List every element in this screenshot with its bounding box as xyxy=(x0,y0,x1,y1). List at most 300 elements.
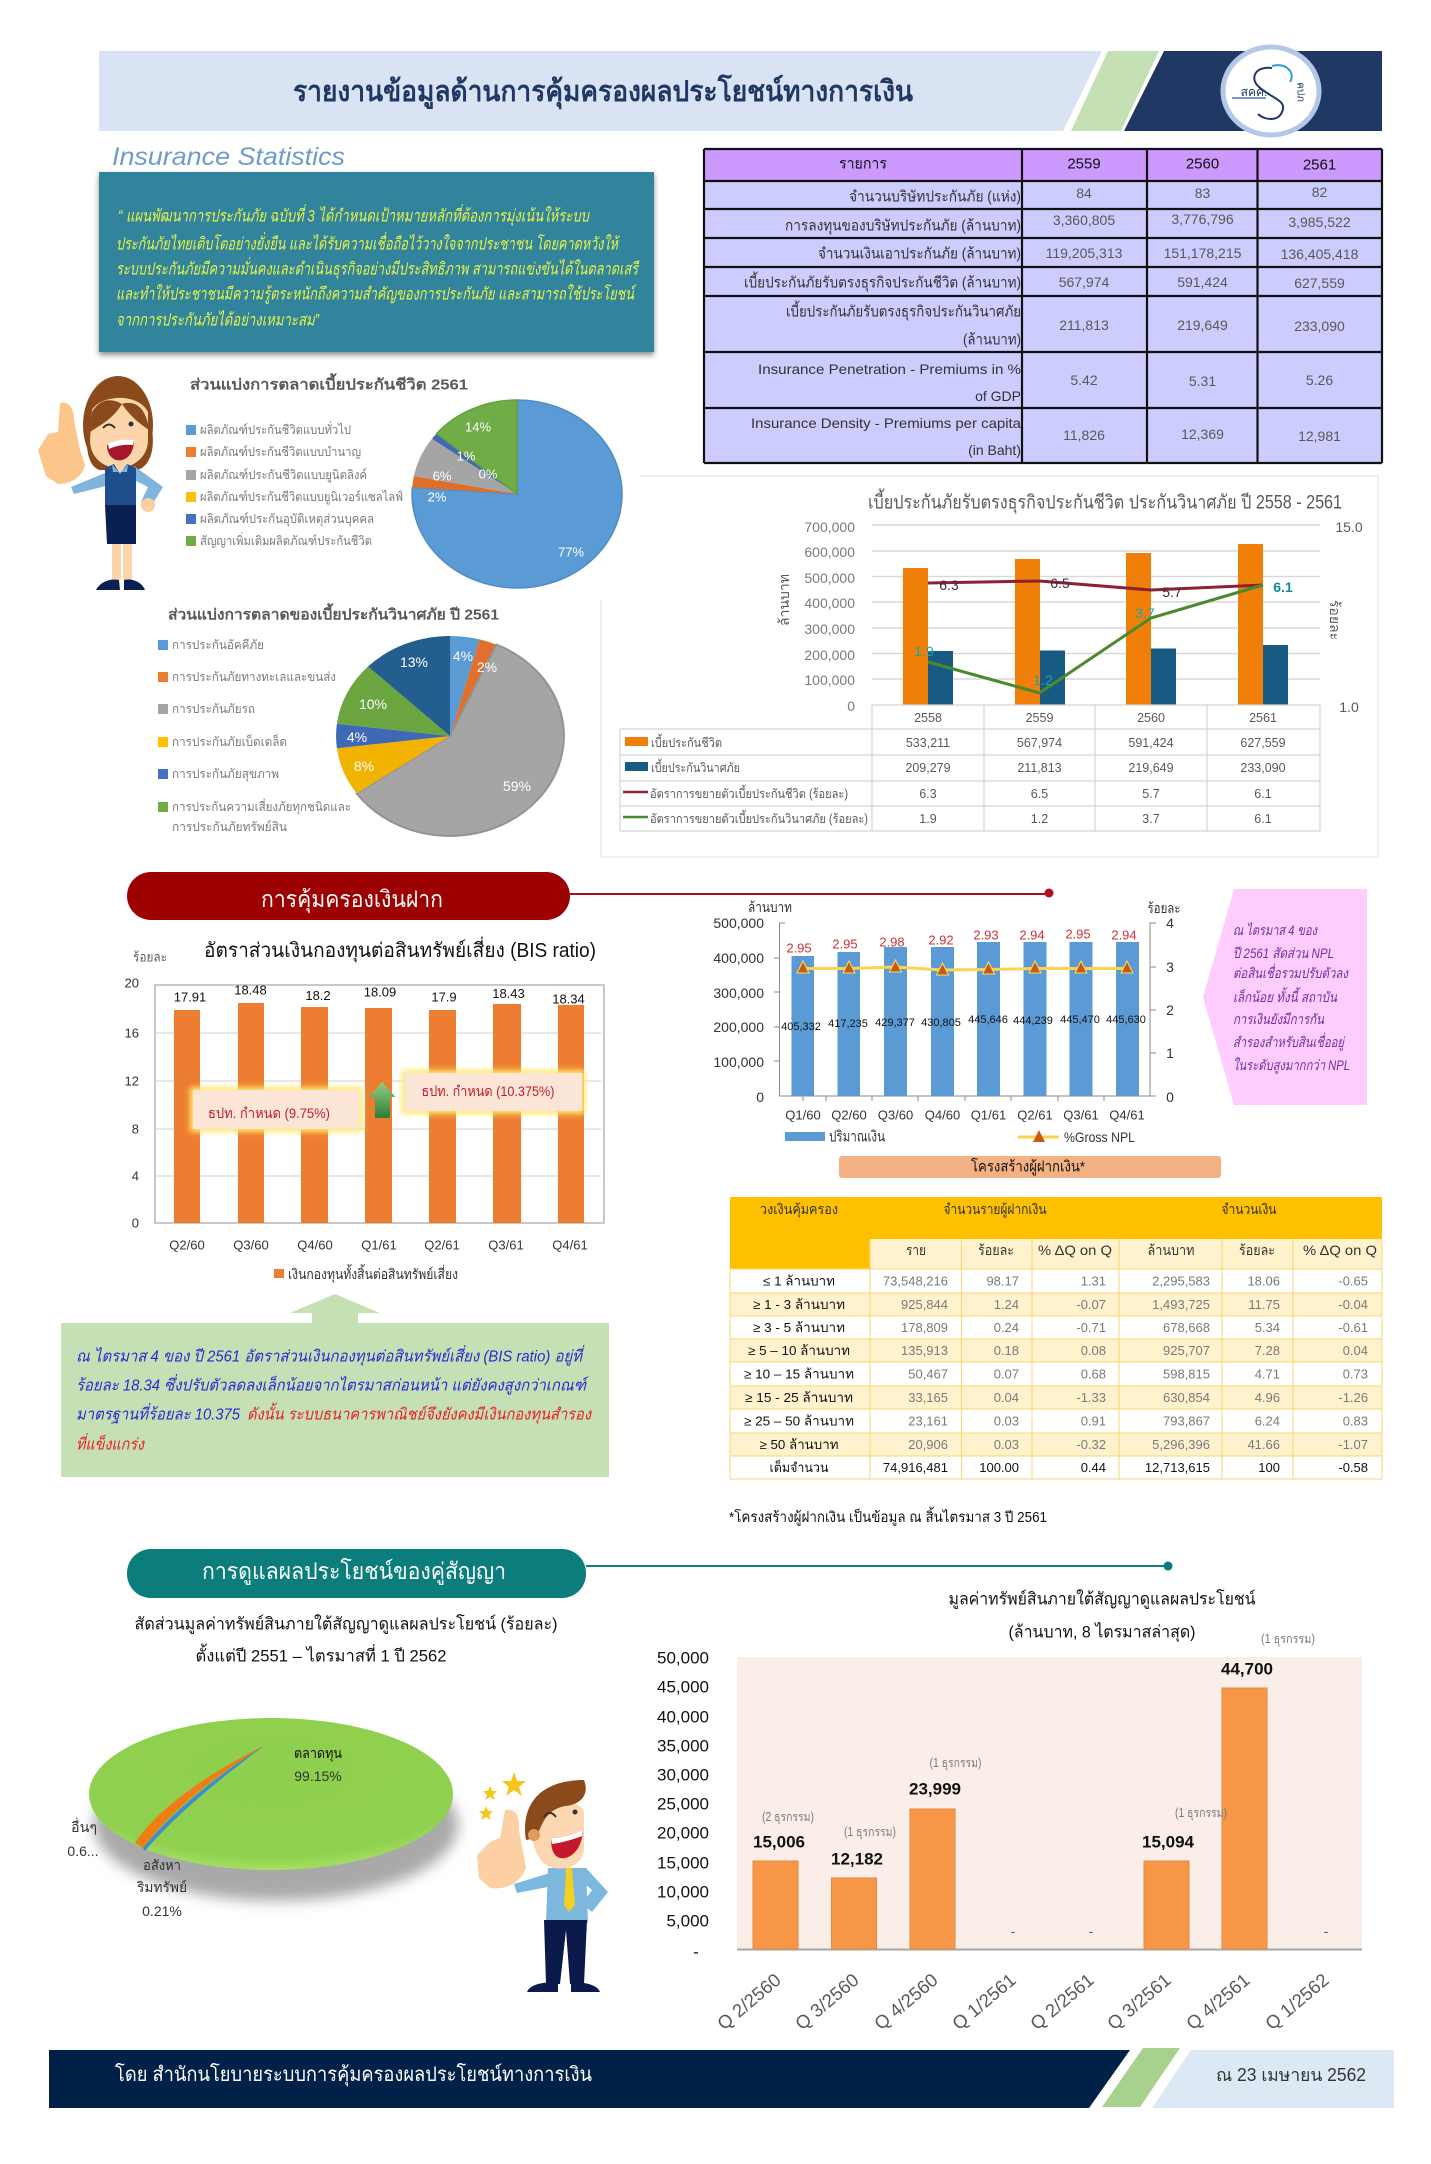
pie labels: 13% xyxy=(400,654,428,670)
callout: 10.375% xyxy=(402,1070,585,1114)
callout: 9.75%: ธปท. กำหนด (9.75%) xyxy=(208,1105,330,1121)
table headers: % ΔQ on Q xyxy=(1038,1242,1112,1258)
pie labels: ริมทรัพย์ xyxy=(137,1879,187,1895)
table rows: 598,815 xyxy=(1163,1366,1210,1382)
table rows: 1.31 xyxy=(1081,1274,1106,1288)
y axis labels: 2 xyxy=(1166,1002,1174,1018)
panel: BIS ratio commentary: ดังนั้น ระบบธนาคารพาณิชย์จึงยังคงมีเงินกองทุนสำรอง xyxy=(247,1402,592,1424)
heading: asset share pie title: สัดส่วนมูลค่าทรัพย์สินภายใต้สัญญาดูแลผลประโยชน์ (ร้อยละ) xyxy=(134,1614,558,1634)
bars xyxy=(174,1003,584,1223)
y axis labels: 16 xyxy=(125,1026,139,1040)
chart: direct premiums 2558-2561 xyxy=(601,476,1378,857)
NPL labels: 2.95 xyxy=(1065,926,1091,942)
table rows: 5.34 xyxy=(1255,1320,1280,1335)
heading: depositor structure: โครงสร้างผู้ฝากเงิน* xyxy=(971,1158,1085,1176)
table rows: 73,548,216 xyxy=(883,1274,948,1288)
table headers: จำนวนรายผู้ฝากเงิน xyxy=(944,1201,1047,1218)
table rows: ≥ 25 – 50 ล้านบาท xyxy=(744,1414,854,1428)
chart title: อัตราส่วนเงินกองทุนต่อสินทรัพย์เสี่ยง (BIS ratio) xyxy=(204,936,596,963)
chart title: มูลค่าทรัพย์สินภายใต้สัญญาดูแลผลประโยชน์ xyxy=(948,1588,1256,1610)
lines xyxy=(928,581,1263,590)
table rows: 18.06 xyxy=(1247,1274,1280,1288)
y axis labels: 3 xyxy=(1166,959,1174,975)
table headers: จำนวนเงิน xyxy=(1222,1201,1277,1217)
NPL labels: 2.94 xyxy=(1111,928,1137,942)
bar values: 444,239 xyxy=(1013,1015,1053,1027)
table rows: ≥ 50 ล้านบาท xyxy=(760,1437,838,1452)
x axis labels: Q 3/2560 xyxy=(791,1969,863,2034)
line labels: 6.3 xyxy=(939,577,959,593)
table header: 2560 xyxy=(1186,156,1219,172)
pie legend: สัญญาเพิ่มเติมผลิตภัณฑ์ประกันชีวิต xyxy=(200,532,372,548)
pie labels: ตลาดทุน xyxy=(294,1745,342,1762)
bar values: 18.09 xyxy=(364,984,396,1000)
y axis labels: 300,000 xyxy=(713,985,764,1001)
pie labels: 0.6... xyxy=(67,1843,99,1859)
pie labels: 8% xyxy=(354,758,374,774)
legend: ปริมาณเงิน xyxy=(829,1128,885,1146)
table values: 211,813 xyxy=(1059,317,1109,333)
bar values: 405,332 xyxy=(781,1021,821,1033)
pie legend: การประกันภัยทรัพย์สิน xyxy=(172,820,287,834)
gridlines xyxy=(872,525,1320,679)
table rows: 0.07 xyxy=(994,1366,1019,1382)
transaction notes: (2 ธุรกรรม) xyxy=(762,1810,814,1825)
data table: 209,279 xyxy=(905,761,951,775)
table rows: ≥ 3 - 5 ล้านบาท xyxy=(753,1320,845,1335)
table rows: ≤ 1 ล้านบาท xyxy=(763,1274,835,1288)
heading: Insurance Statistics: Insurance Statistics xyxy=(112,143,345,171)
bar values: 445,630 xyxy=(1106,1014,1146,1026)
table values: 83 xyxy=(1195,185,1210,201)
x axis labels xyxy=(713,1969,1333,2034)
table rows: 0.04 xyxy=(994,1390,1019,1405)
icon: woman thumbs up xyxy=(38,376,163,590)
pie labels: 10% xyxy=(359,696,387,712)
table values: 136,405,418 xyxy=(1281,246,1359,262)
table row labels: (in Baht) xyxy=(968,442,1021,458)
x axis labels: Q1/61 xyxy=(971,1108,1006,1122)
table rows: 925,844 xyxy=(901,1297,948,1312)
bar values: 18.43 xyxy=(492,986,525,1001)
table rows: เต็มจำนวน xyxy=(770,1458,829,1475)
y axis labels: 10,000 xyxy=(657,1882,709,1902)
table header: รายการ xyxy=(839,156,887,172)
table values: 5.26 xyxy=(1306,372,1333,388)
x axis labels: Q3/61 xyxy=(1063,1108,1099,1122)
x axis labels: Q 1/2561 xyxy=(948,1969,1020,2034)
table rows: 0.08 xyxy=(1081,1343,1106,1358)
table rows: 1.24 xyxy=(994,1297,1019,1312)
table values: 5.31 xyxy=(1189,373,1216,389)
panel: BIS ratio commentary: ร้อยละ 18.34 ซึ่งปรับตัวลดลงเล็กน้อยจากไตรมาสก่อนหน้า แต่ยังคงสูงกว่าเกณฑ์ xyxy=(76,1374,589,1396)
legend: %Gross NPL xyxy=(1064,1129,1135,1145)
line labels: 5.7 xyxy=(1162,584,1182,600)
table header: 2561 xyxy=(1303,156,1336,174)
table rows: 0.44 xyxy=(1081,1460,1106,1475)
table rows: 0.68 xyxy=(1081,1366,1106,1382)
footnote: *โครงสร้างผู้ฝากเงิน เป็นข้อมูล ณ สิ้นไตรมาส 3 ปี 2561 xyxy=(729,1506,1047,1526)
table values: 119,205,313 xyxy=(1046,245,1123,261)
data table: 6.5 xyxy=(1031,787,1048,801)
icon: logo: สคค. xyxy=(1241,85,1267,99)
table values: 5.42 xyxy=(1070,372,1098,388)
table headers: ร้อยละ xyxy=(978,1242,1014,1258)
pie labels xyxy=(428,420,584,560)
table rows: 0.04 xyxy=(1343,1343,1368,1358)
y axis labels xyxy=(713,915,1174,1105)
data table: 6.1 xyxy=(1254,812,1272,826)
chart: BIS ratio xyxy=(125,936,604,1283)
arrow: light green up arrow xyxy=(290,1294,380,1323)
table values: 627,559 xyxy=(1294,275,1345,291)
axes xyxy=(774,923,1156,1101)
x axis labels: Q2/60 xyxy=(831,1108,867,1122)
data table: 1.2 xyxy=(1031,812,1048,826)
line labels: 6.1 xyxy=(1273,579,1293,595)
table rows: 20,906 xyxy=(908,1437,948,1452)
y axis labels: 600,000 xyxy=(804,544,855,560)
empty quarter markers: - xyxy=(1011,1923,1016,1939)
panel: insurance plan quote: “ แผนพัฒนาการประกันภัย ฉบับที่ 3 ได้กำหนดเป้าหมายหลักที่ต้องการมุ่งเน้นให้ระบบ xyxy=(118,204,590,226)
table rows: 0.83 xyxy=(1343,1414,1368,1428)
pie legend xyxy=(186,421,403,548)
y axis labels: 30,000 xyxy=(657,1766,709,1784)
table values xyxy=(1046,184,1359,444)
table row labels: เบี้ยประกันภัยรับตรงธุรกิจประกันวินาศภัย xyxy=(786,300,1021,322)
x axis labels: Q 3/2561 xyxy=(1103,1969,1175,2034)
pie legend: การประกันภัยทางทะเลและขนส่ง xyxy=(172,670,336,684)
chart: deposit volume and gross NPL: ล้านบาท xyxy=(748,899,792,915)
section heading: deposit protection xyxy=(127,872,1054,920)
transaction notes: (1 ธุรกรรม) xyxy=(1175,1806,1227,1821)
pie legend: การประกันภัยเบ็ดเตล็ด xyxy=(172,734,287,749)
table rows: 6.24 xyxy=(1255,1414,1280,1428)
y axis labels: 8 xyxy=(132,1122,139,1136)
pie labels xyxy=(67,1745,342,1919)
y axis labels: 20 xyxy=(125,976,139,990)
line labels: 1.9 xyxy=(914,643,934,659)
x axis labels: Q4/60 xyxy=(297,1238,333,1252)
bars xyxy=(753,1688,1267,1949)
data table: 1.9 xyxy=(919,812,937,826)
data table: 6.3 xyxy=(919,787,937,801)
table values: 82 xyxy=(1312,184,1327,200)
chart: BIS ratio: เงินกองทุนทั้งสิ้นต่อสินทรัพย์เสี่ยง xyxy=(288,1264,458,1283)
pie labels: 99.15% xyxy=(294,1768,342,1784)
x axis labels: Q4/61 xyxy=(552,1238,588,1252)
heading: asset share pie title xyxy=(134,1614,558,1666)
table rows: 678,668 xyxy=(1163,1320,1210,1335)
bar values: 15,006 xyxy=(753,1832,805,1852)
pie labels: 6% xyxy=(433,468,452,484)
y axis labels: 5,000 xyxy=(666,1912,709,1930)
x axis labels: Q 4/2560 xyxy=(870,1969,942,2034)
callout: NPL commentary: เล็กน้อย ทั้งนี้ สถาบัน xyxy=(1233,987,1337,1005)
pie labels: 0% xyxy=(479,466,498,482)
bar values: 15,094 xyxy=(1142,1832,1195,1852)
pie labels: 2% xyxy=(428,490,447,504)
table rows: -1.26 xyxy=(1338,1390,1368,1405)
table rows: -0.07 xyxy=(1076,1297,1106,1312)
y axis labels: 35,000 xyxy=(657,1736,709,1756)
pie legend: การประกันภัยรถ xyxy=(172,702,255,716)
chart: deposit volume and gross NPL: ร้อยละ xyxy=(1148,900,1180,916)
table headers xyxy=(760,1201,1377,1258)
pie labels: 77% xyxy=(558,544,584,560)
y axis labels: 40,000 xyxy=(657,1708,709,1726)
panel: insurance plan quote xyxy=(99,172,654,355)
x axis labels: Q 2/2560 xyxy=(713,1969,785,2034)
chart: life insurance market share pie xyxy=(186,372,622,588)
bar values: 17.91 xyxy=(174,990,206,1004)
x axis labels: Q 2/2561 xyxy=(1026,1969,1098,2034)
pie legend: การประกันอัคคีภัย xyxy=(172,638,264,652)
x axis labels: Q3/60 xyxy=(233,1238,269,1252)
data table: 211,813 xyxy=(1017,761,1062,775)
pie labels: 2% xyxy=(477,659,497,675)
y axis labels: 12 xyxy=(125,1074,139,1088)
bar values: 12,182 xyxy=(831,1850,883,1868)
x axis labels: Q3/61 xyxy=(488,1238,524,1252)
table rows: ≥ 15 - 25 ล้านบาท xyxy=(745,1390,853,1405)
y axis labels: 15.0 xyxy=(1335,519,1363,535)
y axis labels: 100,000 xyxy=(804,672,855,688)
table rows: -0.61 xyxy=(1338,1320,1368,1335)
table row labels: จำนวนบริษัทประกันภัย (แห่ง) xyxy=(849,188,1021,206)
table values: 219,649 xyxy=(1177,317,1228,333)
table rows: ≥ 10 – 15 ล้านบาท xyxy=(744,1366,854,1382)
pie labels: 59% xyxy=(503,778,531,794)
table row labels: Insurance Density - Premiums per capita xyxy=(751,415,1021,431)
y axis labels: 50,000 xyxy=(657,1648,709,1668)
callout: NPL commentary xyxy=(1203,889,1367,1105)
y axis labels: ล้านบาท xyxy=(776,574,792,626)
pie labels xyxy=(347,648,531,794)
empty quarter markers: - xyxy=(1089,1923,1094,1939)
table rows: 0.03 xyxy=(994,1414,1019,1428)
y axis labels: 1.0 xyxy=(1339,699,1359,715)
table values: 3,776,796 xyxy=(1171,211,1234,227)
table values: 151,178,215 xyxy=(1164,245,1242,261)
panel: insurance plan quote: และทำให้ประชาชนมีความรู้ตระหนักถึงความสำคัญของการประกันภัย และสามารถใช้ประโยชน์ xyxy=(116,284,637,304)
table rows: 41.66 xyxy=(1247,1437,1280,1452)
pie labels: 4% xyxy=(453,648,473,664)
table headers: ร้อยละ xyxy=(1239,1242,1275,1258)
pie labels: 14% xyxy=(465,420,491,434)
panel: BIS ratio commentary: ที่แข็งแกร่ง xyxy=(76,1432,145,1454)
pie title: ส่วนแบ่งการตลาดของเบี้ยประกันวินาศภัย ปี 2561 xyxy=(168,602,499,624)
table rows: 50,467 xyxy=(908,1366,948,1382)
y axis labels: 20,000 xyxy=(657,1824,709,1842)
chart: non-life insurance market share pie xyxy=(158,602,564,836)
table values: 591,424 xyxy=(1177,274,1228,290)
table rows: 12,713,615 xyxy=(1145,1460,1210,1475)
arrow: increase xyxy=(369,1082,396,1118)
pie legend: ผลิตภัณฑ์ประกันชีวิตแบบทั่วไป xyxy=(200,421,351,437)
callout: 9.75% xyxy=(190,1087,362,1132)
data table: 5.7 xyxy=(1142,787,1160,801)
table row labels xyxy=(744,188,1021,458)
table rows: 100.00 xyxy=(979,1460,1019,1475)
icon: logo xyxy=(1223,47,1319,135)
table rows: -0.71 xyxy=(1076,1320,1106,1335)
icon: logo: คปภ xyxy=(1294,82,1306,102)
data table: 2559 xyxy=(1026,711,1053,725)
legend xyxy=(785,1128,1135,1146)
bar values xyxy=(174,982,585,1006)
y axis labels: 0 xyxy=(756,1089,764,1105)
table rows: 925,707 xyxy=(1163,1343,1210,1358)
y axis labels: 15,000 xyxy=(657,1854,709,1872)
y axis labels: ร้อยละ xyxy=(1327,600,1343,640)
NPL markers xyxy=(797,960,1133,975)
line labels: 3.7 xyxy=(1135,605,1155,621)
table row labels: การลงทุนของบริษัทประกันภัย (ล้านบาท) xyxy=(785,218,1021,236)
bar values: 417,235 xyxy=(828,1018,868,1030)
table rows: 4.71 xyxy=(1255,1366,1280,1382)
data table: 627,559 xyxy=(1240,736,1286,750)
table header xyxy=(839,156,1336,174)
table values: 567,974 xyxy=(1059,274,1110,290)
y axis labels: 500,000 xyxy=(713,915,764,931)
bar values: 17.9 xyxy=(431,990,457,1004)
pie labels: 1% xyxy=(457,448,476,464)
y axis labels: 700,000 xyxy=(804,519,855,535)
data table: เบี้ยประกันชีวิต xyxy=(651,733,722,750)
callout: NPL commentary: การเงินยังมีการกัน xyxy=(1233,1011,1324,1027)
transaction notes: (1 ธุรกรรม) xyxy=(844,1825,896,1840)
data table: 533,211 xyxy=(906,736,950,750)
pie labels: 0.21% xyxy=(142,1903,182,1919)
chart: BIS ratio: ร้อยละ xyxy=(133,950,167,964)
pie legend xyxy=(158,638,351,834)
panel: insurance plan quote: ระบบประกันภัยมีความมั่นคงและดำเนินธุรกิจอย่างมีประสิทธิภาพ สามารถแข่งขันได้ในตลาดเสรี xyxy=(116,256,640,280)
chart title: เบี้ยประกันภัยรับตรงธุรกิจประกันชีวิต ประกันวินาศภัย ปี 2558 - 2561 xyxy=(868,488,1342,514)
pie legend: ผลิตภัณฑ์ประกันอุบัติเหตุส่วนบุคคล xyxy=(200,512,374,527)
plot frame xyxy=(155,985,604,1223)
panel: BIS ratio commentary xyxy=(61,1323,609,1477)
pie labels: อสังหา xyxy=(143,1857,181,1873)
table values: 12,981 xyxy=(1298,428,1341,444)
table rows: 74,916,481 xyxy=(883,1460,948,1475)
panel: insurance plan quote: จากการประกันภัยได้อย่างเหมาะสม” xyxy=(116,310,320,330)
y axis labels: 25,000 xyxy=(657,1794,709,1814)
table values: 233,090 xyxy=(1294,318,1345,334)
callout: NPL commentary: ต่อสินเชื่อรวมปรับตัวลง xyxy=(1233,963,1349,981)
table rows: -0.65 xyxy=(1338,1274,1368,1288)
table rows: 178,809 xyxy=(901,1320,948,1335)
y axis labels: 400,000 xyxy=(804,595,855,611)
y axis labels: 45,000 xyxy=(657,1678,709,1696)
chart: assets under contract xyxy=(657,1588,1362,2034)
x axis labels: Q 4/2561 xyxy=(1182,1969,1254,2034)
table row labels: เบี้ยประกันภัยรับตรงธุรกิจประกันชีวิต (ล้านบาท) xyxy=(744,272,1021,292)
data table: 2561 xyxy=(1249,711,1277,725)
pie labels: 4% xyxy=(347,729,367,745)
table rows: 135,913 xyxy=(901,1343,948,1358)
table rows: 0.73 xyxy=(1343,1366,1368,1382)
bar values: 430,805 xyxy=(921,1017,961,1029)
NPL labels: 2.95 xyxy=(832,936,858,952)
table rows: 1,493,725 xyxy=(1152,1297,1210,1312)
table rows: -1.33 xyxy=(1076,1390,1106,1405)
y axis labels: 200,000 xyxy=(713,1019,764,1035)
y axis labels: 100,000 xyxy=(713,1054,764,1070)
x axis labels: Q2/61 xyxy=(1017,1108,1053,1122)
y axis labels xyxy=(125,976,139,1230)
table headers: ราย xyxy=(906,1242,926,1258)
table headers: ล้านบาท xyxy=(1148,1242,1194,1258)
date: ณ 23 เมษายน 2562 xyxy=(1216,2065,1366,2085)
chart: deposit volume and gross NPL xyxy=(713,899,1180,1146)
table rows: 100 xyxy=(1258,1460,1280,1475)
legend xyxy=(274,1269,284,1278)
x axis labels: Q4/60 xyxy=(925,1108,960,1122)
table header: 2559 xyxy=(1067,156,1101,172)
y axis labels xyxy=(657,1648,709,1962)
pie slices xyxy=(336,636,564,836)
table values: 3,985,522 xyxy=(1288,214,1351,230)
bars xyxy=(903,544,1288,705)
table rows xyxy=(744,1274,1368,1475)
line labels: 1.2 xyxy=(1033,672,1053,688)
chart: assets under contract: (ล้านบาท, 8 ไตรมาสล่าสุด) xyxy=(1008,1622,1196,1642)
heading: asset share pie title: ตั้งแต่ปี 2551 – ไตรมาสที่ 1 ปี 2562 xyxy=(196,1644,446,1666)
bar values: 18.48 xyxy=(234,982,267,998)
callout: 10.375%: ธปท. กำหนด (10.375%) xyxy=(422,1083,554,1099)
y axis labels: 4 xyxy=(132,1168,139,1184)
NPL labels: 2.98 xyxy=(879,934,905,950)
NPL labels xyxy=(786,926,1137,956)
x axis labels: Q4/61 xyxy=(1109,1108,1145,1122)
data table xyxy=(620,705,1320,831)
table rows: -0.32 xyxy=(1076,1437,1106,1452)
table: depositor structure xyxy=(730,1197,1382,1479)
table rows: 2,295,583 xyxy=(1152,1274,1210,1288)
y axis labels: 400,000 xyxy=(713,950,764,966)
x axis labels: Q 1/2562 xyxy=(1261,1969,1333,2034)
callout: NPL commentary: ปี 2561 สัดส่วน NPL xyxy=(1233,945,1334,961)
x axis labels: Q1/61 xyxy=(361,1238,397,1252)
y axis labels xyxy=(776,519,1363,715)
section heading: policyholder benefit protection: การดูแลผลประโยชน์ของคู่สัญญา xyxy=(202,1558,506,1585)
data table: อัตราการขยายตัวเบี้ยประกันวินาศภัย (ร้อยละ) xyxy=(650,809,868,826)
bar values: 23,999 xyxy=(909,1780,961,1798)
section heading: policyholder benefit protection xyxy=(127,1549,1172,1598)
table rows: 793,867 xyxy=(1163,1414,1210,1428)
table headers: วงเงินคุ้มครอง xyxy=(760,1201,838,1218)
table rows: 23,161 xyxy=(908,1414,948,1428)
table: insurance statistics xyxy=(704,149,1382,463)
chart: asset share 3D pie xyxy=(67,1718,458,1919)
panel: BIS ratio commentary: มาตรฐานที่ร้อยละ 10.375 xyxy=(76,1402,240,1424)
pie legend: ผลิตภัณฑ์ประกันชีวิตแบบยูนิตลิงค์ xyxy=(200,468,367,483)
table rows: -1.07 xyxy=(1338,1437,1368,1452)
NPL labels: 2.93 xyxy=(973,928,999,942)
footer text: โดย สำนักนโยบายระบบการคุ้มครองผลประโยชน์ทางการเงิน xyxy=(115,2063,592,2087)
bars xyxy=(792,942,1139,1096)
heading: depositor structure xyxy=(839,1156,1221,1178)
table rows: ≥ 5 – 10 ล้านบาท xyxy=(748,1343,850,1358)
x axis labels: Q3/60 xyxy=(878,1108,913,1122)
header banner xyxy=(99,47,1382,135)
data table: 2560 xyxy=(1137,711,1165,725)
line labels xyxy=(914,575,1293,688)
table rows: 98.17 xyxy=(986,1274,1019,1288)
NPL labels: 2.94 xyxy=(1019,928,1045,942)
bar values: 44,700 xyxy=(1221,1660,1273,1678)
